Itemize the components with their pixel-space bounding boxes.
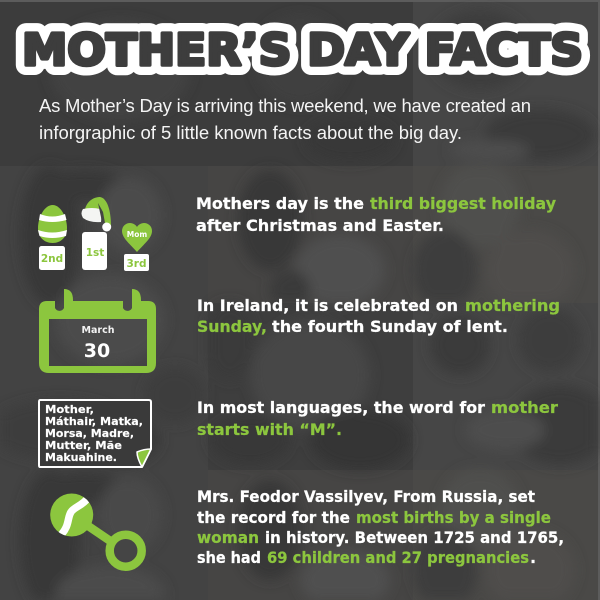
fact 4 text: Mrs. Feodor Vassilyev, From Russia, set: [197, 487, 535, 506]
title: MOTHER’S DAY FACTS: [22, 25, 583, 76]
fact 4 text: 69 children and 27 pregnancies: [267, 548, 529, 567]
fact 1 text: third biggest holiday: [370, 194, 557, 213]
fact 2 text: Sunday,: [197, 317, 267, 336]
icon: calendar: [39, 289, 156, 373]
fact 1 text: Mothers day is the: [196, 194, 364, 213]
fact 2 text: In Ireland, it is celebrated on: [197, 296, 458, 315]
icon: easter egg: [38, 205, 67, 243]
icon: calendar: 30: [84, 340, 110, 362]
icon: heart: Mom: [127, 230, 147, 239]
intro text: [39, 95, 531, 143]
fact 2 text: the fourth Sunday of lent.: [272, 317, 508, 336]
fact 4 text: in history. Between 1725 and 1765,: [265, 528, 564, 547]
callout: languages note: Mutter, Mãe: [45, 440, 122, 452]
fact 4 text: [197, 487, 564, 567]
intro text: As Mother’s Day is arriving this weekend, we have created an: [39, 95, 531, 116]
fact 4 text: woman: [197, 528, 259, 547]
callout: languages note: Mother,: [45, 404, 94, 416]
fact 3 text: [197, 398, 558, 439]
icon: baby rattle: [50, 494, 142, 567]
fact 1 text: [196, 194, 557, 235]
callout: languages note: Morsa, Madre,: [45, 428, 134, 440]
icon: calendar: March: [82, 325, 115, 336]
fact 4 text: most births by a single: [356, 508, 551, 527]
fact 1 text: after Christmas and Easter.: [196, 216, 444, 235]
fact 4 text: .: [530, 548, 536, 567]
fact 4 text: the record for the: [197, 508, 350, 527]
title: MOTHER’S DAY FACTS: [22, 25, 583, 76]
fact 3 text: starts with “M”.: [197, 420, 342, 439]
first place box: 1st: [86, 247, 104, 259]
fact 2 text: mothering: [465, 296, 560, 315]
fact 2 text: [197, 296, 560, 336]
callout: languages note: Máthair, Matka,: [45, 416, 143, 428]
callout: languages note: [39, 400, 151, 467]
callout: languages note: Makuahine.: [45, 452, 117, 464]
third place box: 3rd: [126, 258, 147, 270]
icon: holiday podium: [38, 197, 152, 271]
fact 3 text: mother: [491, 398, 558, 417]
intro text: inforgraphic of 5 little known facts about the big day.: [39, 122, 462, 143]
fact 4 text: she had: [197, 548, 261, 567]
fact 3 text: In most languages, the word for: [197, 398, 485, 417]
icon: santa hat: [82, 197, 111, 232]
second place box: 2nd: [41, 253, 63, 265]
